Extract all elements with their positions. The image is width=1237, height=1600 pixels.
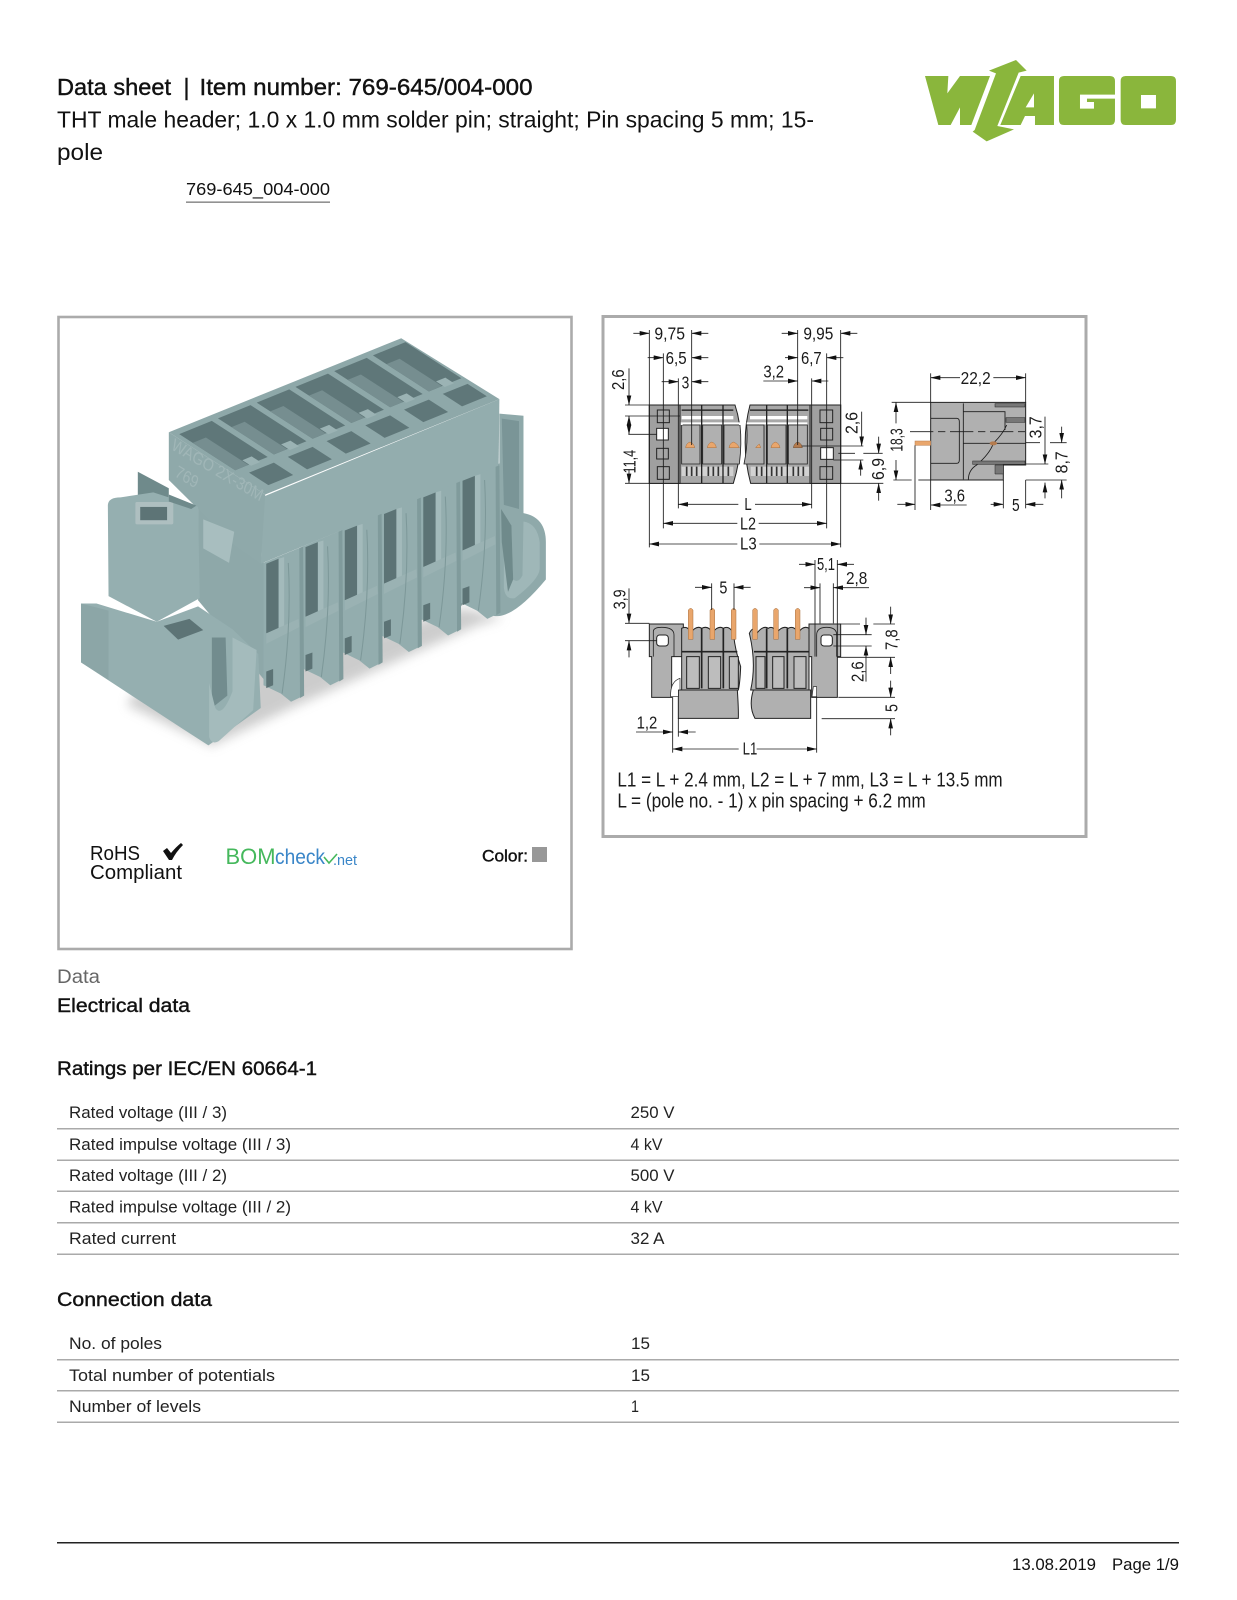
subtitle <box>57 106 814 165</box>
RoHS compliant mark: RoHS <box>90 842 140 865</box>
drawing: side view: 3,6 <box>944 486 965 506</box>
row: rated impulse voltage III/3: 4 kV <box>630 1135 663 1154</box>
row: no. of poles: No. of poles <box>69 1334 162 1353</box>
row: levels: 1 <box>631 1397 639 1416</box>
drawing: front view: 9,95 <box>803 323 833 343</box>
subtitle: THT male header; 1.0 x 1.0 mm solder pin; straight; Pin spacing 5 mm; 15- <box>57 106 814 132</box>
drawing: front view: 6,7 <box>801 348 822 368</box>
WAGO logo <box>925 60 1176 141</box>
drawing: bottom view: 5 <box>881 704 901 712</box>
drawing: side view: 18,3 <box>886 428 906 452</box>
row: rated impulse voltage III/2 <box>57 1198 1179 1224</box>
drawing: front view: 6,9 <box>868 458 888 480</box>
product illustration: male header: 769 <box>172 463 201 493</box>
item link: 769-645_004-000 <box>186 179 330 200</box>
RoHS compliant mark <box>90 842 183 884</box>
row: rated current: Rated current <box>69 1229 176 1248</box>
title: Item number: 769-645/004-000 <box>200 74 532 100</box>
drawing: front view: 9,75 <box>654 323 685 343</box>
footer <box>57 1542 1179 1574</box>
product illustration: male header: WAGO 2X-30M <box>169 436 265 506</box>
drawing: front view: 3,2 <box>763 361 784 381</box>
row: levels <box>57 1397 1179 1423</box>
drawing: bottom view: 2,8 <box>846 568 867 588</box>
drawing: bottom view: 3,9 <box>609 589 629 609</box>
row: rated voltage III/2: 500 V <box>630 1166 675 1185</box>
row: rated current: 32 A <box>630 1229 665 1248</box>
title <box>57 74 532 100</box>
drawing: front view: L2 <box>740 513 756 533</box>
row: rated voltage III/3 <box>57 1103 1179 1130</box>
BOMcheck logo <box>226 844 358 869</box>
row: rated impulse voltage III/3: Rated impulse voltage (III / 3) <box>69 1135 291 1154</box>
drawing: front view: 2,6 <box>841 412 861 434</box>
drawing: side view: 8,7 <box>1051 451 1071 473</box>
product illustration: male header <box>81 338 546 745</box>
drawing: front view: 2,6 <box>608 369 628 390</box>
BOMcheck logo: BOM <box>226 844 276 869</box>
drawing: front view: 3 <box>682 372 689 392</box>
drawing: side view: 3,7 <box>1025 416 1045 438</box>
RoHS compliant mark: Compliant <box>90 861 182 884</box>
section label: Data: Data <box>57 966 100 988</box>
row: rated voltage III/3: Rated voltage (III / 3) <box>69 1103 227 1122</box>
drawing: bottom view: 5,1 <box>817 554 835 574</box>
row: levels: Number of levels <box>69 1397 201 1416</box>
row: total potentials: 15 <box>631 1366 650 1385</box>
BOMcheck logo: .net <box>333 852 358 869</box>
wells on top face <box>179 342 488 488</box>
row: rated voltage III/3: 250 V <box>630 1103 675 1122</box>
footer: 13.08.2019 <box>1012 1556 1096 1574</box>
drawing: bottom view <box>609 554 1003 813</box>
drawing: front view: 11,4 <box>619 450 639 473</box>
drawing: side view: 22,2 <box>961 368 991 388</box>
table: connection data <box>57 1334 1179 1423</box>
title: Data sheet <box>57 74 172 100</box>
heading: Electrical data: Electrical data <box>57 995 190 1017</box>
heading: Ratings: Ratings per IEC/EN 60664-1 <box>57 1058 317 1080</box>
title: | <box>184 74 189 100</box>
row: total potentials: Total number of potentials <box>69 1366 275 1385</box>
drawing: front view: L3 <box>740 533 757 553</box>
drawing: bottom view: 1,2 <box>637 712 657 732</box>
drawing: front view <box>608 323 888 553</box>
drawing: side view <box>886 368 1071 515</box>
row: rated impulse voltage III/2: Rated impulse voltage (III / 2) <box>69 1198 291 1216</box>
drawing: bottom view: L1 = L + 2.4 mm, L2 = L + 7 mm, L3 = L + 13.5 mm <box>617 770 1003 792</box>
row: rated voltage III/2: Rated voltage (III / 2) <box>69 1166 227 1185</box>
subtitle: pole <box>57 139 103 165</box>
row: total potentials <box>57 1366 1179 1392</box>
drawing: front view: 6,5 <box>666 348 687 368</box>
color swatch: Color: <box>482 848 528 866</box>
heading: Connection data: Connection data <box>57 1289 212 1311</box>
panel: dimension drawings <box>603 316 1086 836</box>
drawing: bottom view: L = (pole no. - 1) x pin spacing + 6.2 mm <box>617 791 926 813</box>
row: rated current <box>57 1229 1179 1255</box>
panel: product photo <box>58 317 572 949</box>
drawing: front view: L <box>744 494 752 514</box>
row: rated impulse voltage III/2: 4 kV <box>630 1198 663 1216</box>
color swatch <box>482 847 547 866</box>
row: no. of poles <box>57 1334 1179 1360</box>
row: rated voltage III/2 <box>57 1166 1179 1192</box>
drawing: side view: 5 <box>1012 495 1020 515</box>
table: ratings <box>57 1103 1179 1255</box>
row: no. of poles: 15 <box>631 1334 650 1353</box>
row: rated impulse voltage III/3 <box>57 1135 1179 1161</box>
BOMcheck logo: check <box>275 846 325 869</box>
drawing: bottom view: 5 <box>719 577 727 597</box>
drawing: bottom view: 2,6 <box>847 661 867 682</box>
footer: Page 1/9 <box>1112 1556 1179 1574</box>
drawing: bottom view: L1 <box>743 738 757 758</box>
drawing: bottom view: 7,8 <box>881 629 901 650</box>
